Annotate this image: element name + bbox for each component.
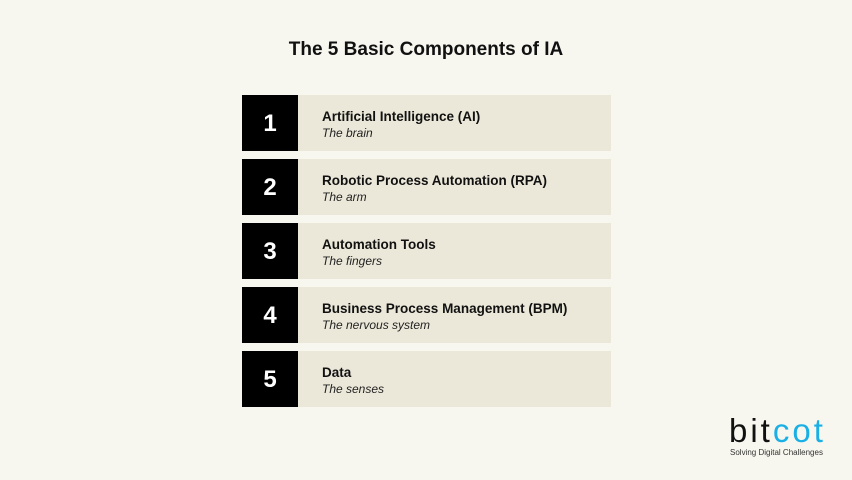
row 3: Automation Tools (322, 237, 436, 252)
row 3 (242, 223, 611, 279)
row 5: 5 (263, 366, 277, 393)
title: The 5 Basic Components of IA (289, 39, 563, 60)
row 1: Artificial Intelligence (AI) (322, 109, 480, 124)
row 4: Business Process Management (BPM) (322, 301, 567, 316)
logo: bitcot (729, 412, 826, 449)
row 3: The fingers (322, 254, 382, 268)
row 4: 4 (263, 302, 277, 329)
row 1 (242, 95, 611, 151)
row 5: Data (322, 365, 351, 380)
row 2 (242, 159, 611, 215)
row 5: The senses (322, 382, 384, 396)
row 2: Robotic Process Automation (RPA) (322, 173, 547, 188)
row 1: The brain (322, 126, 373, 140)
row 4: The nervous system (322, 318, 430, 332)
row 2: The arm (322, 190, 367, 204)
row 5 (242, 351, 611, 407)
row 2: 2 (263, 174, 277, 201)
row 3: 3 (263, 238, 277, 265)
row 4 (242, 287, 611, 343)
tagline: Solving Digital Challenges (730, 448, 823, 457)
row 1: 1 (263, 110, 277, 137)
